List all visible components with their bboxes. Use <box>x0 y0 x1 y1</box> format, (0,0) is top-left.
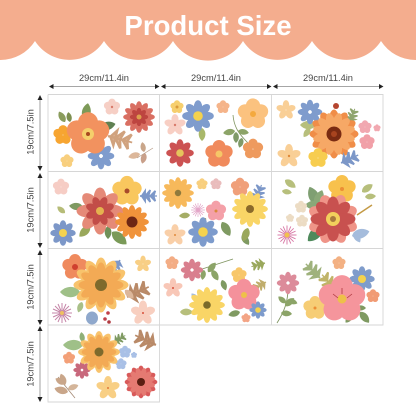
main orange daisy <box>308 108 360 160</box>
width dimension: column 2 <box>161 73 272 89</box>
red daisy <box>124 365 158 399</box>
title: Product Size <box>124 10 292 41</box>
panel: sticker 2 <box>164 98 270 169</box>
main red flower <box>300 186 366 252</box>
panel: sticker 3 <box>276 100 381 169</box>
pink flower <box>226 279 262 312</box>
main red flower <box>77 188 123 234</box>
height dimension: row 3 <box>26 250 42 325</box>
width dimension: column 1: 29cm/11.4in <box>79 73 129 83</box>
sticker grid outline <box>48 94 383 402</box>
height dimension: row 2: 19cm/7.5in <box>26 187 36 233</box>
panel: sticker 7 <box>52 254 156 325</box>
panel: sticker 9 <box>277 256 380 325</box>
height dimension: row 1 <box>26 95 42 171</box>
main yellow daisy <box>73 257 129 313</box>
panel: sticker 5 <box>162 177 268 247</box>
width dimension: column 3: 29cm/11.4in <box>303 73 353 83</box>
height dimension: row 2 <box>26 173 42 248</box>
panel: sticker 1 <box>52 99 155 169</box>
panel: sticker 10 <box>54 328 159 400</box>
height dimension: row 4: 19cm/7.5in <box>26 341 36 387</box>
panel: sticker 4 <box>50 176 157 248</box>
main yellow daisy <box>78 331 120 373</box>
panel: sticker 8 <box>163 256 268 323</box>
big pink flower <box>316 275 368 325</box>
height dimension: row 3: 19cm/7.5in <box>26 264 36 310</box>
width dimension: column 1 <box>49 73 160 89</box>
scalloped header banner <box>0 0 416 61</box>
width dimension: column 3 <box>273 73 384 89</box>
height dimension: row 4 <box>26 326 42 402</box>
height dimension: row 1: 19cm/7.5in <box>26 109 36 155</box>
panel: sticker 6 <box>278 175 376 252</box>
width dimension: column 2: 29cm/11.4in <box>191 73 241 83</box>
main orange flower <box>64 112 112 158</box>
